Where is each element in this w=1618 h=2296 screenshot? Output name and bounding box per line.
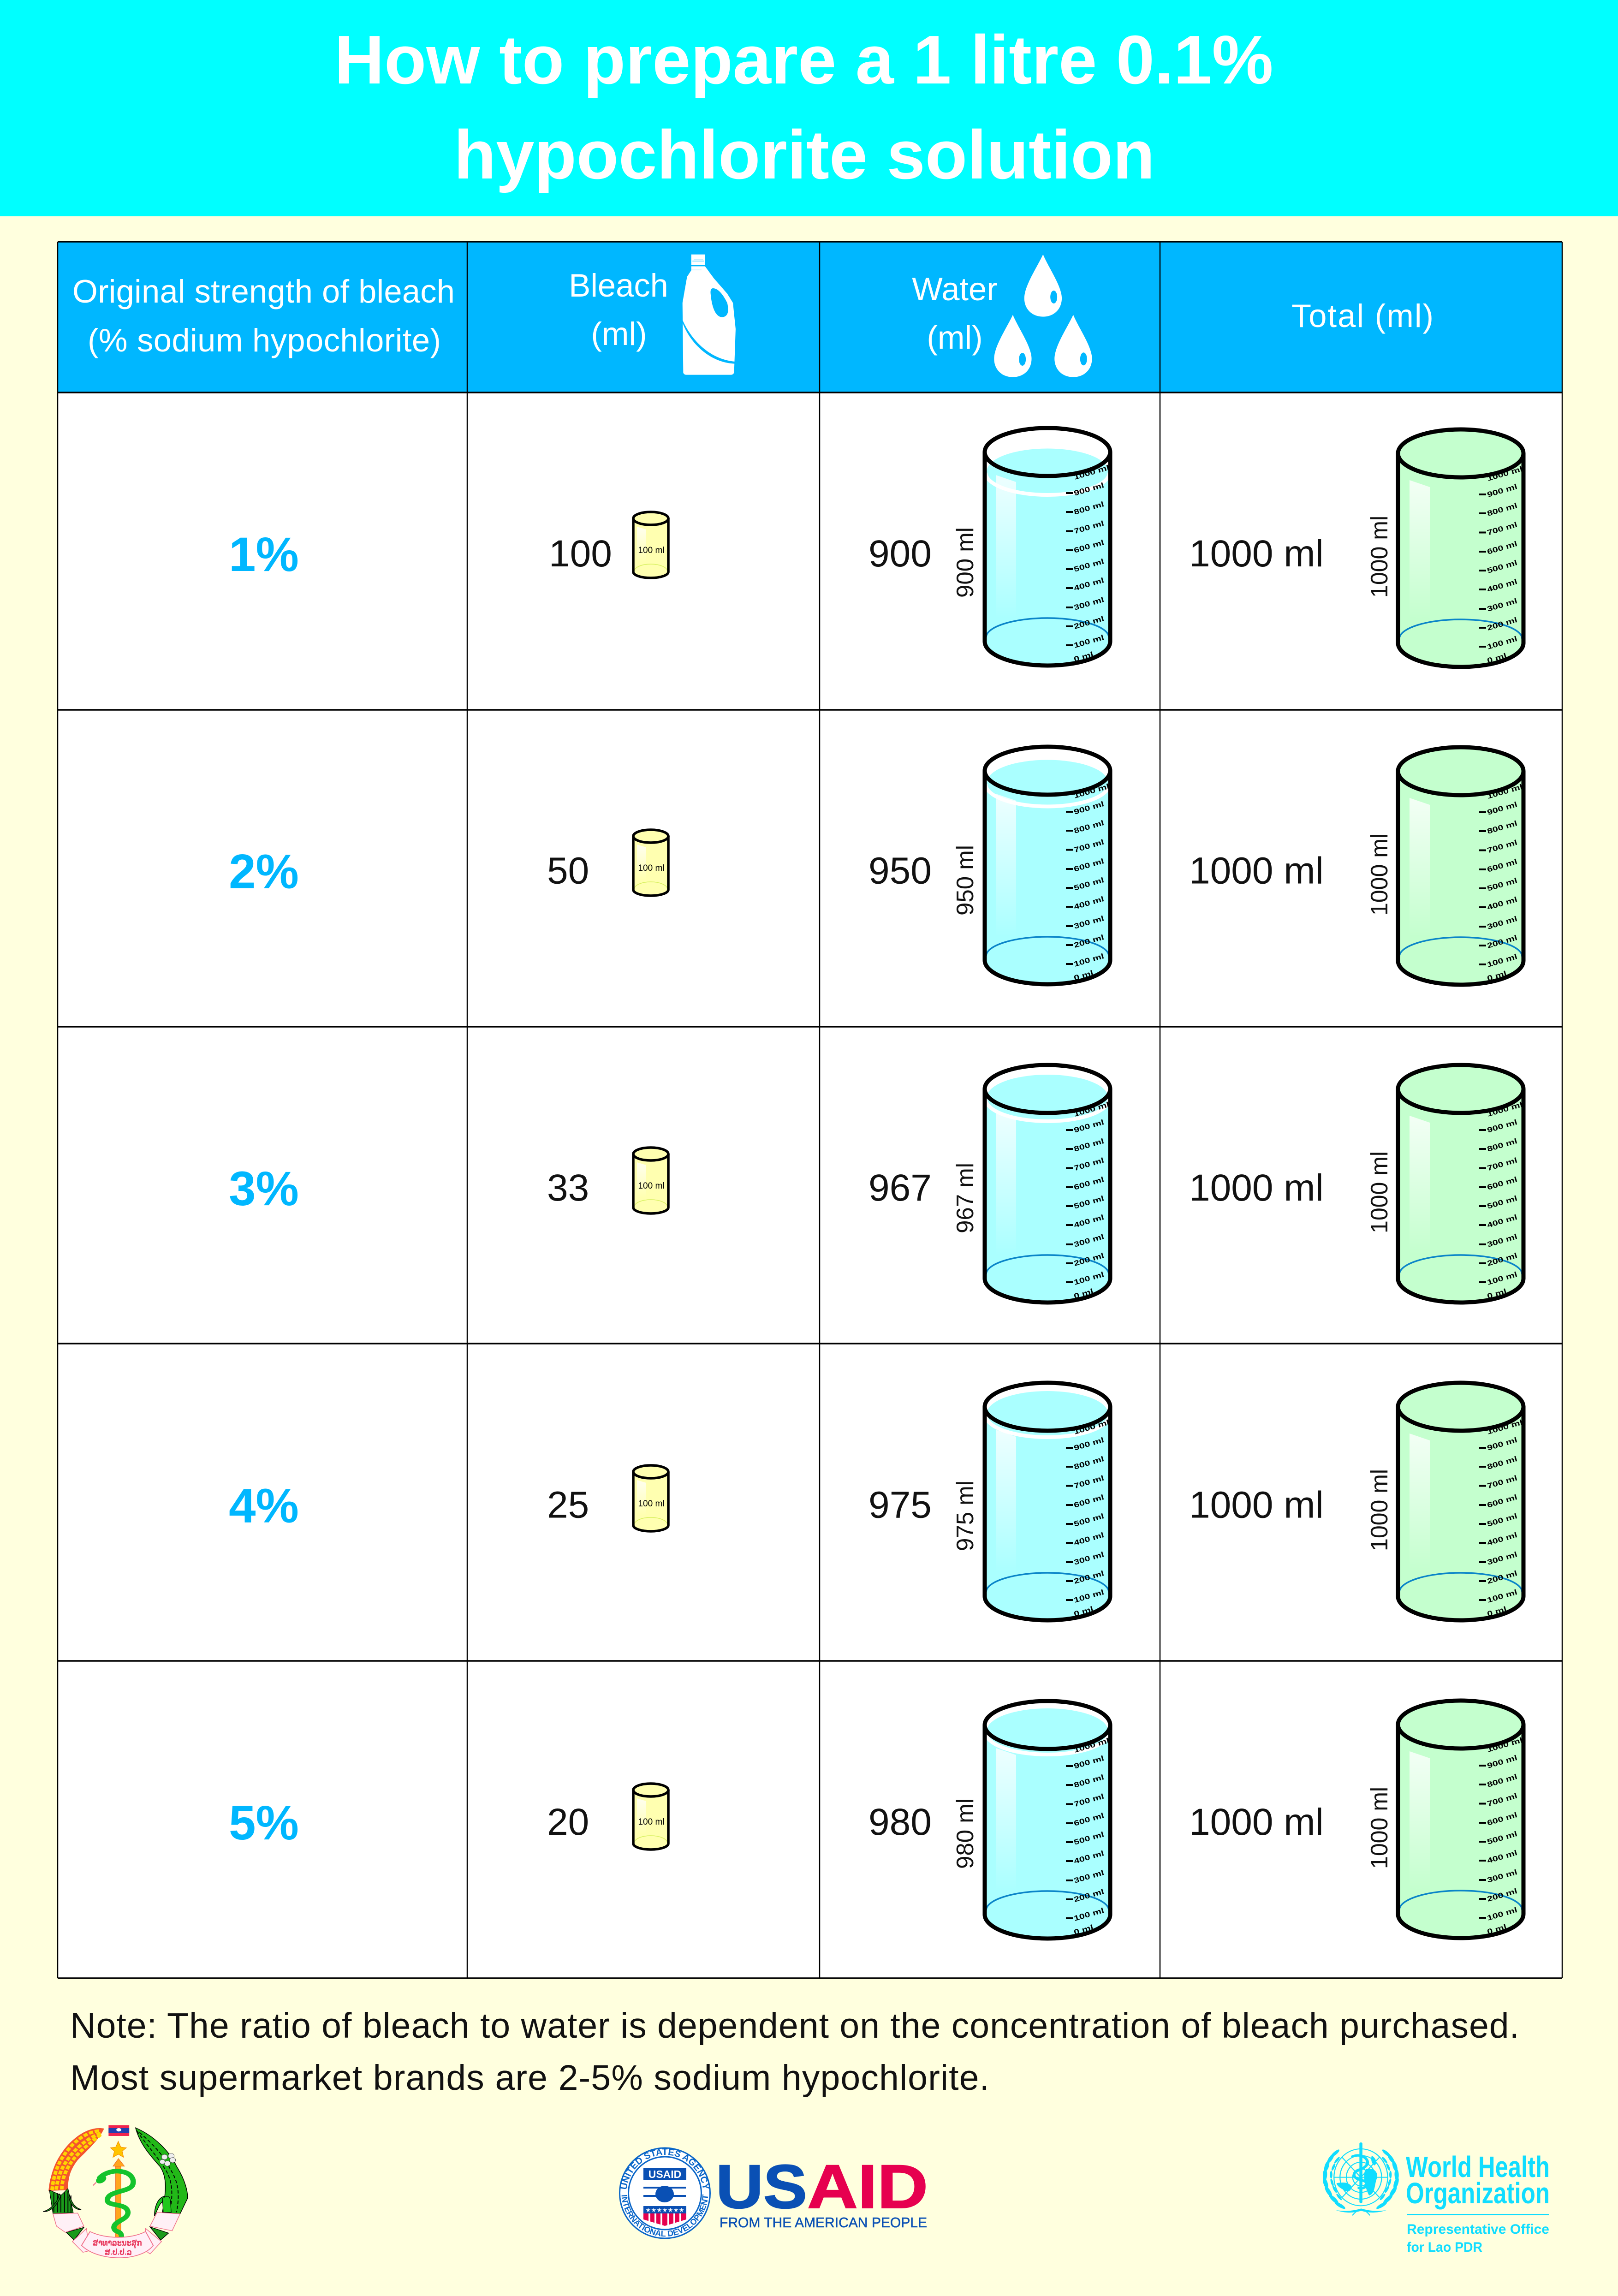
rotated label 950 ml: 950 ml — [952, 845, 979, 916]
WHO wordmark: Organization — [1406, 2177, 1550, 2210]
beaker: total 1000 ml — [1398, 747, 1523, 985]
beaker: water 980 ml — [985, 1701, 1110, 1939]
seal: USAID — [648, 2168, 681, 2180]
beaker: total 1000 ml: 100 ml — [1486, 1271, 1518, 1287]
flag — [108, 2125, 129, 2136]
ribbons and scroll: ສ.ປ.ປ.ລ — [105, 2248, 132, 2256]
title banner — [0, 0, 1618, 216]
beaker: water 950 ml: 400 ml — [1073, 895, 1105, 911]
beaker: total 1000 ml: 0 ml — [1486, 970, 1508, 983]
header: total: Total (ml) — [1291, 297, 1434, 334]
row 4% — [229, 1383, 1523, 1620]
beaker: total 1000 ml: 700 ml — [1486, 1156, 1518, 1173]
beaker: water 900 ml: 600 ml — [1073, 539, 1105, 555]
header: bleach: Bleach — [569, 267, 668, 303]
beaker: total 1000 ml — [1398, 1383, 1523, 1620]
star — [111, 2141, 126, 2157]
water amount 967: 967 — [868, 1167, 932, 1209]
WHO wordmark: Representative Office — [1407, 2222, 1549, 2237]
beaker: water 900 ml: 0 ml — [1073, 650, 1095, 664]
beaker: water 900 ml: 300 ml — [1073, 596, 1105, 612]
header: bleach — [569, 267, 668, 352]
beaker: total 1000 ml: 900 ml — [1486, 1436, 1518, 1452]
beaker: water 975 ml: 100 ml — [1073, 1588, 1105, 1605]
ribbons and scroll — [53, 2213, 180, 2258]
beaker: total 1000 ml: 200 ml — [1486, 934, 1518, 950]
table — [58, 242, 1562, 1978]
beaker: water 980 ml: 200 ml — [1073, 1888, 1105, 1904]
beaker: total 1000 ml: 1000 ml — [1486, 1736, 1523, 1754]
note text — [70, 2006, 1519, 2098]
beaker: total 1000 ml: 400 ml — [1486, 1213, 1518, 1230]
beaker: water 950 ml: 900 ml — [1073, 800, 1105, 816]
beaker: water 967 ml: 400 ml — [1073, 1213, 1105, 1230]
beaker: total 1000 ml: 600 ml — [1486, 1493, 1518, 1510]
header: bleach: (ml) — [591, 315, 647, 352]
beaker: water 980 ml: 400 ml — [1073, 1850, 1105, 1866]
seal — [619, 2147, 711, 2238]
beaker: total 1000 ml: 600 ml — [1486, 1811, 1518, 1827]
header: original strength: Original strength of bleach — [72, 273, 455, 309]
row 1% — [229, 428, 1523, 667]
beaker: water 950 ml: 0 ml — [1073, 969, 1095, 982]
beaker: water 950 ml: 100 ml — [1073, 952, 1105, 969]
rotated label 1000 ml: 1000 ml — [1366, 833, 1393, 916]
water amount 975: 975 — [868, 1484, 932, 1526]
beaker: total 1000 ml: 500 ml — [1486, 1195, 1518, 1211]
header: water: Water — [912, 271, 998, 307]
total amount 1000 ml: 1000 ml — [1189, 1484, 1324, 1526]
beaker: total 1000 ml: 300 ml — [1486, 1551, 1518, 1567]
beaker: total 1000 ml — [1398, 1065, 1523, 1303]
beaker: total 1000 ml: 800 ml — [1486, 502, 1518, 518]
row 5% — [229, 1701, 1523, 1939]
bleach amount 33: 33 — [547, 1167, 589, 1209]
beaker: total 1000 ml: 400 ml — [1486, 1531, 1518, 1547]
beaker: water 950 ml — [985, 747, 1110, 984]
seal: INTERNATIONAL DEVELOPMENT — [620, 2194, 710, 2238]
beaker: water 950 ml: 700 ml — [1073, 838, 1105, 855]
beaker: water 967 ml: 100 ml — [1073, 1271, 1105, 1287]
beaker: total 1000 ml: 400 ml — [1486, 896, 1518, 912]
beaker: total 1000 ml: 200 ml — [1486, 616, 1518, 632]
rotated label 967 ml: 967 ml — [952, 1163, 979, 1233]
beaker: total 1000 ml: 0 ml — [1486, 1605, 1508, 1618]
beaker: water 900 ml: 1000 ml — [1073, 464, 1110, 482]
beaker: water 967 ml: 0 ml — [1073, 1287, 1095, 1301]
beaker: total 1000 ml: 600 ml — [1486, 540, 1518, 556]
icon: small bleach cup — [633, 1784, 668, 1850]
logo: Lao Ministry of Health emblem — [43, 2125, 188, 2258]
beaker: water 900 ml: 500 ml — [1073, 558, 1105, 574]
seal: ★★★★★★★ — [646, 2207, 684, 2214]
rotated label 1000 ml: 1000 ml — [1366, 1787, 1393, 1869]
beaker: total 1000 ml: 500 ml — [1486, 559, 1518, 575]
beaker: water 950 ml: 300 ml — [1073, 915, 1105, 931]
beaker: water 950 ml: 1000 ml — [1073, 782, 1110, 800]
beaker: total 1000 ml: 1000 ml — [1486, 465, 1523, 483]
beaker: water 975 ml: 400 ml — [1073, 1531, 1105, 1547]
bleach amount 20: 20 — [547, 1801, 589, 1843]
beaker: water 967 ml: 300 ml — [1073, 1233, 1105, 1249]
beaker: water 980 ml: 100 ml — [1073, 1907, 1105, 1923]
beaker: total 1000 ml: 400 ml — [1486, 578, 1518, 594]
beaker: total 1000 ml: 0 ml — [1486, 1923, 1508, 1936]
wordmark — [716, 2153, 928, 2231]
WHO wordmark: World Health — [1406, 2150, 1550, 2183]
beaker: water 967 ml: 1000 ml — [1073, 1100, 1110, 1118]
beaker: total 1000 ml: 300 ml — [1486, 1233, 1518, 1249]
icon: small bleach cup — [633, 1465, 668, 1531]
staff and snake — [93, 2159, 133, 2238]
beaker: water 967 ml: 200 ml — [1073, 1252, 1105, 1268]
beaker: total 1000 ml: 700 ml — [1486, 521, 1518, 537]
beaker: total 1000 ml: 100 ml — [1486, 635, 1518, 651]
beaker: water 975 ml: 500 ml — [1073, 1512, 1105, 1529]
beaker: total 1000 ml: 100 ml — [1486, 1906, 1518, 1922]
beaker: total 1000 ml: 100 ml — [1486, 1588, 1518, 1605]
beaker: total 1000 ml: 1000 ml — [1486, 1418, 1523, 1436]
beaker: water 900 ml: 900 ml — [1073, 482, 1105, 498]
beaker: total 1000 ml: 200 ml — [1486, 1252, 1518, 1268]
beaker: total 1000 ml — [1398, 429, 1523, 667]
beaker: total 1000 ml: 800 ml — [1486, 820, 1518, 836]
beaker: total 1000 ml: 700 ml — [1486, 1792, 1518, 1808]
beaker: total 1000 ml: 300 ml — [1486, 597, 1518, 613]
beaker: water 980 ml: 700 ml — [1073, 1792, 1105, 1809]
beaker: water 967 ml — [985, 1065, 1110, 1303]
beaker: water 980 ml: 600 ml — [1073, 1812, 1105, 1828]
rotated label 975 ml: 975 ml — [952, 1481, 979, 1551]
icon: bleach bottle — [683, 255, 736, 375]
beaker: total 1000 ml: 500 ml — [1486, 877, 1518, 893]
row 3% — [229, 1065, 1523, 1303]
bleach amount 25: 25 — [547, 1484, 589, 1526]
water amount 950: 950 — [868, 850, 932, 892]
beaker: water 900 ml: 200 ml — [1073, 615, 1105, 631]
wordmark: AID — [807, 2153, 928, 2221]
header: water — [912, 271, 998, 356]
beaker: total 1000 ml: 800 ml — [1486, 1455, 1518, 1471]
beaker: water 900 ml: 100 ml — [1073, 634, 1105, 650]
strength 4%: 4% — [229, 1479, 299, 1533]
seal: UNITED STATES AGENCY — [619, 2147, 711, 2191]
header: original strength: (% sodium hypochlorite) — [88, 322, 441, 358]
title banner: How to prepare a 1 litre 0.1% — [334, 21, 1273, 98]
beaker: water 980 ml: 800 ml — [1073, 1773, 1105, 1790]
beaker: total 1000 ml: 800 ml — [1486, 1773, 1518, 1789]
beaker: total 1000 ml: 0 ml — [1486, 1287, 1508, 1301]
beaker: water 950 ml: 500 ml — [1073, 876, 1105, 892]
strength 1%: 1% — [229, 528, 299, 582]
beaker: total 1000 ml: 900 ml — [1486, 1754, 1518, 1770]
icon: small bleach cup — [633, 1148, 668, 1213]
beaker: water 975 ml: 1000 ml — [1073, 1418, 1110, 1436]
beaker: water 980 ml: 1000 ml — [1073, 1737, 1110, 1755]
rotated label 1000 ml: 1000 ml — [1366, 516, 1393, 598]
beaker: total 1000 ml: 300 ml — [1486, 915, 1518, 931]
icon: small bleach cup: 100 ml — [638, 1181, 665, 1191]
beaker: water 967 ml: 500 ml — [1073, 1195, 1105, 1211]
beaker: total 1000 ml: 900 ml — [1486, 483, 1518, 499]
beaker: total 1000 ml: 700 ml — [1486, 839, 1518, 855]
icon: small bleach cup: 100 ml — [638, 546, 665, 555]
beaker: water 975 ml: 300 ml — [1073, 1551, 1105, 1567]
ribbons and scroll: ສາທາລະນະສຸກ — [93, 2238, 142, 2249]
wordmark: US — [716, 2153, 807, 2221]
rotated label 900 ml: 900 ml — [952, 527, 979, 598]
beaker: water 900 ml: 800 ml — [1073, 500, 1105, 517]
beaker: total 1000 ml: 800 ml — [1486, 1137, 1518, 1154]
total amount 1000 ml: 1000 ml — [1189, 850, 1324, 892]
beaker: total 1000 ml: 700 ml — [1486, 1474, 1518, 1491]
strength 2%: 2% — [229, 845, 299, 898]
beaker: total 1000 ml: 500 ml — [1486, 1512, 1518, 1529]
beaker: water 980 ml: 300 ml — [1073, 1869, 1105, 1885]
strength 5%: 5% — [229, 1796, 299, 1850]
icon: water drops — [994, 255, 1092, 377]
beaker: water 967 ml: 700 ml — [1073, 1156, 1105, 1173]
rice wreath — [43, 2128, 104, 2213]
beaker: water 980 ml: 0 ml — [1073, 1923, 1095, 1937]
strength 3%: 3% — [229, 1162, 299, 1216]
beaker: water 900 ml: 700 ml — [1073, 519, 1105, 536]
note text: Most supermarket brands are 2-5% sodium hypochlorite. — [70, 2058, 989, 2098]
beaker: total 1000 ml: 200 ml — [1486, 1570, 1518, 1586]
bleach amount 50: 50 — [547, 850, 589, 892]
beaker: total 1000 ml: 200 ml — [1486, 1887, 1518, 1903]
cotton wreath — [136, 2128, 188, 2216]
icon: small bleach cup — [633, 830, 668, 896]
beaker: total 1000 ml: 900 ml — [1486, 1118, 1518, 1135]
beaker: water 975 ml: 800 ml — [1073, 1455, 1105, 1471]
beaker: water 950 ml: 200 ml — [1073, 934, 1105, 950]
beaker: water 975 ml: 200 ml — [1073, 1570, 1105, 1586]
total amount 1000 ml: 1000 ml — [1189, 1801, 1324, 1843]
total amount 1000 ml: 1000 ml — [1189, 533, 1324, 575]
rotated label 1000 ml: 1000 ml — [1366, 1151, 1393, 1233]
header: original strength — [72, 273, 455, 358]
beaker: total 1000 ml: 0 ml — [1486, 652, 1508, 665]
beaker: water 967 ml: 900 ml — [1073, 1118, 1105, 1135]
note text: Note: The ratio of bleach to water is dependent on the concentration of bleach purchased. — [70, 2006, 1519, 2046]
beaker: total 1000 ml: 1000 ml — [1486, 1100, 1523, 1118]
bleach amount 100: 100 — [549, 533, 612, 575]
beaker: water 900 ml: 400 ml — [1073, 577, 1105, 593]
rotated label 980 ml: 980 ml — [952, 1798, 979, 1869]
beaker: total 1000 ml: 500 ml — [1486, 1830, 1518, 1846]
row 2% — [229, 747, 1523, 985]
beaker: water 980 ml: 900 ml — [1073, 1755, 1105, 1771]
WHO emblem — [1322, 2142, 1400, 2215]
beaker: total 1000 ml: 600 ml — [1486, 858, 1518, 874]
beaker: water 975 ml: 900 ml — [1073, 1436, 1105, 1452]
beaker: water 975 ml — [985, 1383, 1110, 1620]
beaker: water 967 ml: 800 ml — [1073, 1137, 1105, 1154]
water amount 900: 900 — [868, 533, 932, 575]
logo: USAID — [619, 2147, 928, 2238]
beaker: total 1000 ml: 300 ml — [1486, 1868, 1518, 1885]
beaker: water 975 ml: 600 ml — [1073, 1493, 1105, 1510]
beaker: total 1000 ml — [1398, 1701, 1523, 1938]
icon: small bleach cup: 100 ml — [638, 1499, 665, 1509]
beaker: water 975 ml: 700 ml — [1073, 1474, 1105, 1491]
beaker: water 975 ml: 0 ml — [1073, 1605, 1095, 1618]
beaker: total 1000 ml: 1000 ml — [1486, 783, 1523, 801]
title banner: hypochlorite solution — [454, 116, 1155, 193]
beaker: water 950 ml: 800 ml — [1073, 819, 1105, 835]
beaker: water 950 ml: 600 ml — [1073, 857, 1105, 874]
water amount 980: 980 — [868, 1801, 932, 1843]
WHO wordmark — [1406, 2150, 1550, 2255]
icon: small bleach cup — [633, 512, 668, 578]
beaker: total 1000 ml: 900 ml — [1486, 801, 1518, 817]
beaker: total 1000 ml: 100 ml — [1486, 953, 1518, 969]
beaker: water 980 ml: 500 ml — [1073, 1831, 1105, 1847]
beaker: total 1000 ml: 400 ml — [1486, 1849, 1518, 1865]
beaker: total 1000 ml: 600 ml — [1486, 1176, 1518, 1192]
beaker: water 967 ml: 600 ml — [1073, 1176, 1105, 1192]
wordmark: FROM THE AMERICAN PEOPLE — [720, 2214, 927, 2231]
WHO wordmark: for Lao PDR — [1407, 2240, 1482, 2255]
rotated label 1000 ml: 1000 ml — [1366, 1469, 1393, 1551]
header: water: (ml) — [927, 319, 983, 356]
icon: small bleach cup: 100 ml — [638, 1817, 665, 1827]
beaker: water 900 ml — [985, 428, 1110, 666]
icon: small bleach cup: 100 ml — [638, 863, 665, 873]
logo: World Health Organization — [1322, 2142, 1550, 2255]
total amount 1000 ml: 1000 ml — [1189, 1167, 1324, 1209]
